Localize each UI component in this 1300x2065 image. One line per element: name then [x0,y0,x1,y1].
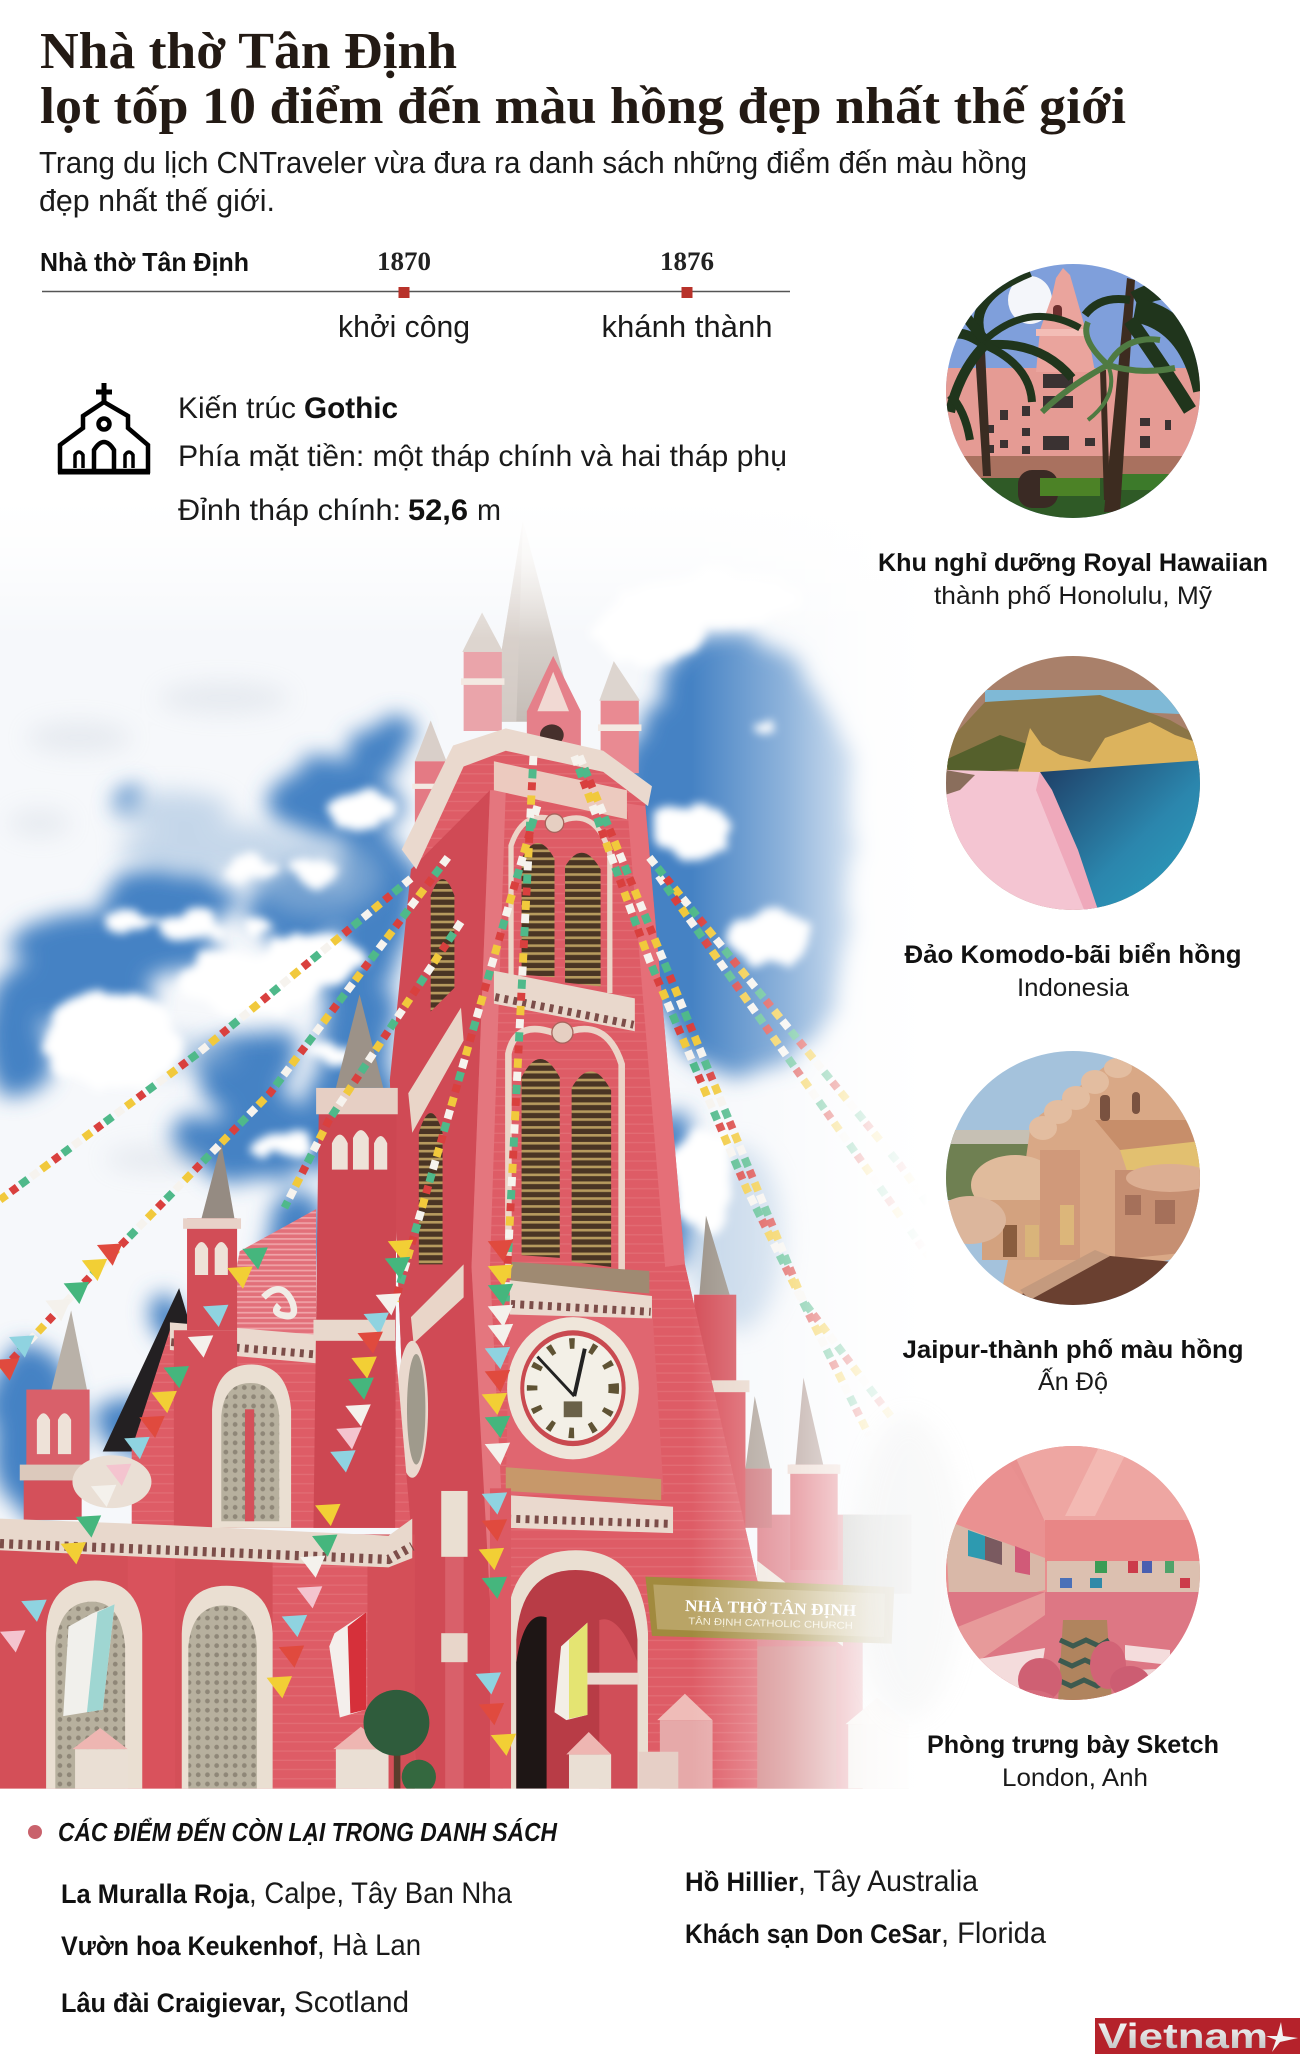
label: Royal Hawaiian: Khu nghỉ dưỡng Royal Hawaiian [878,549,1268,577]
palms [975,350,991,476]
title: Nhà thờ Tân Định [40,23,457,80]
label: Sketch gallery: Phòng trưng bày Sketch [927,1731,1219,1759]
label: Jaipur: Ấn Độ [1038,1367,1108,1396]
architecture facts [178,392,787,527]
destinations list: left column [61,1877,512,2019]
label: Royal Hawaiian: thành phố Honolulu, Mỹ [934,582,1213,610]
architecture facts: Đỉnh tháp chính: [178,494,401,527]
milestone 1870: 1870 [377,247,431,276]
cornice [402,728,652,869]
dark roof [103,1288,190,1451]
blue sky patches [0,632,856,1511]
destinations list: left column: , Calpe, Tây Ban Nha [249,1877,512,1910]
milestone 1876: 1876 [660,247,714,276]
destinations list: right column: Khách sạn Don CeSar [685,1919,941,1949]
timeline [40,247,790,344]
sky base [0,628,716,1534]
destinations list: left column: Lâu đài Craigievar, [61,1988,286,2018]
band mid [494,971,635,1031]
label: Komodo: Indonesia [1017,974,1129,1002]
clock [507,1317,639,1459]
main tower body [390,728,757,1789]
destinations list: left column: La Muralla Roja [61,1879,250,1909]
subtitle [39,145,1027,218]
label: Royal Hawaiian [878,549,1268,610]
milestone 1870 [338,247,470,344]
side windows [431,879,454,1012]
destinations list: left column: Vườn hoa Keukenhof [61,1931,318,1961]
sign board [645,1577,894,1789]
destinations list: left column: , Hà Lan [317,1929,421,1962]
hanging banners [63,1604,587,1720]
label: Sketch gallery [927,1731,1219,1792]
sign board: NHÀ THỜ TÂN ĐỊNH [685,1596,857,1620]
gallery art [945,1520,1045,1612]
panel: Jaipur [902,1045,1244,1396]
destinations list: left column: Scotland [294,1986,409,2019]
upper wall [132,1330,411,1528]
right fade [691,500,929,1791]
cloud shading [8,682,290,1172]
title: lọt tốp 10 điểm đến màu hồng đẹp nhất thế giới [40,78,1126,135]
scroll ornament [72,1455,151,1508]
pennant strings [0,756,961,1436]
panel: Royal Hawaiian [878,260,1268,610]
tower side face [390,790,503,1789]
architecture facts: Kiến trúc [178,392,296,425]
destinations list: right column: , Florida [941,1917,1046,1950]
milestone 1876 [602,247,772,344]
sign board: TÂN ĐỊNH CATHOLIC CHURCH [688,1616,853,1632]
upper bell openings [511,817,610,993]
photo: Jaipur [934,1045,1214,1315]
pale haze [79,792,784,1330]
rose window [396,1341,428,1478]
far left turret [51,1311,87,1390]
upper arch window [212,1365,291,1528]
title [40,23,1126,135]
architecture facts: Phía mặt tiền: một tháp chính và hai tháp phụ [178,440,787,473]
timeline: Nhà thờ Tân Định [40,247,249,277]
faint palm [853,1416,964,1719]
panel: Sketch gallery [927,1440,1219,1792]
lower bell openings [508,1029,622,1278]
logo: Vietnam+: Vietnam [1098,2017,1268,2056]
photo: Sketch gallery [940,1440,1210,1714]
lower arch windows [46,1581,142,1789]
architecture facts: Gothic [304,392,398,425]
label: Jaipur: Jaipur-thành phố màu hồng [902,1336,1244,1364]
left nave [0,994,415,1791]
top fade [0,500,1300,639]
destinations list: right column: Hồ Hillier [685,1867,798,1897]
subtitle: đẹp nhất thế giới. [39,183,275,218]
main tower spire [502,545,581,746]
label: Sketch gallery: London, Anh [1002,1764,1148,1792]
tables and chairs [940,1592,1210,1702]
gable [237,1209,316,1334]
doorway arch [441,1488,648,1789]
subtitle: Trang du lịch CNTraveler vừa đưa ra danh sách những điểm đến màu hồng [39,145,1027,180]
lower wall [0,1534,415,1791]
church photo panel [0,540,912,1789]
milestone 1876: khánh thành [602,309,772,344]
label: Jaipur [902,1336,1244,1396]
destinations list: right column [685,1865,1046,1950]
clouds [45,570,813,1231]
large pennants [0,1240,516,1756]
remaining destinations heading: CÁC ĐIỂM ĐẾN CÒN LẠI TRONG DANH SÁCH [58,1817,558,1847]
plinths and bushes [72,1690,909,1794]
logo: Vietnam+ [1095,2017,1300,2056]
destinations list: right column: , Tây Australia [798,1865,978,1898]
milestone 1870: khởi công [338,309,470,344]
label: Komodo: Đảo Komodo-bãi biển hồng [904,941,1242,969]
main cornice [0,1519,412,1567]
main tower pinnacles [412,612,641,830]
clock panel [506,1297,664,1495]
photo: Royal Hawaiian [940,260,1210,523]
architecture facts: 52,6 [408,494,468,527]
far right towers [694,1216,885,1789]
photo: Komodo [940,650,1210,920]
icon: church [58,383,150,472]
middle turret [202,1143,234,1218]
side tower [336,994,383,1088]
label: Komodo [904,941,1242,1002]
architecture facts: m [477,494,501,527]
bullet [28,1825,42,1839]
panel: Komodo [904,650,1242,1002]
